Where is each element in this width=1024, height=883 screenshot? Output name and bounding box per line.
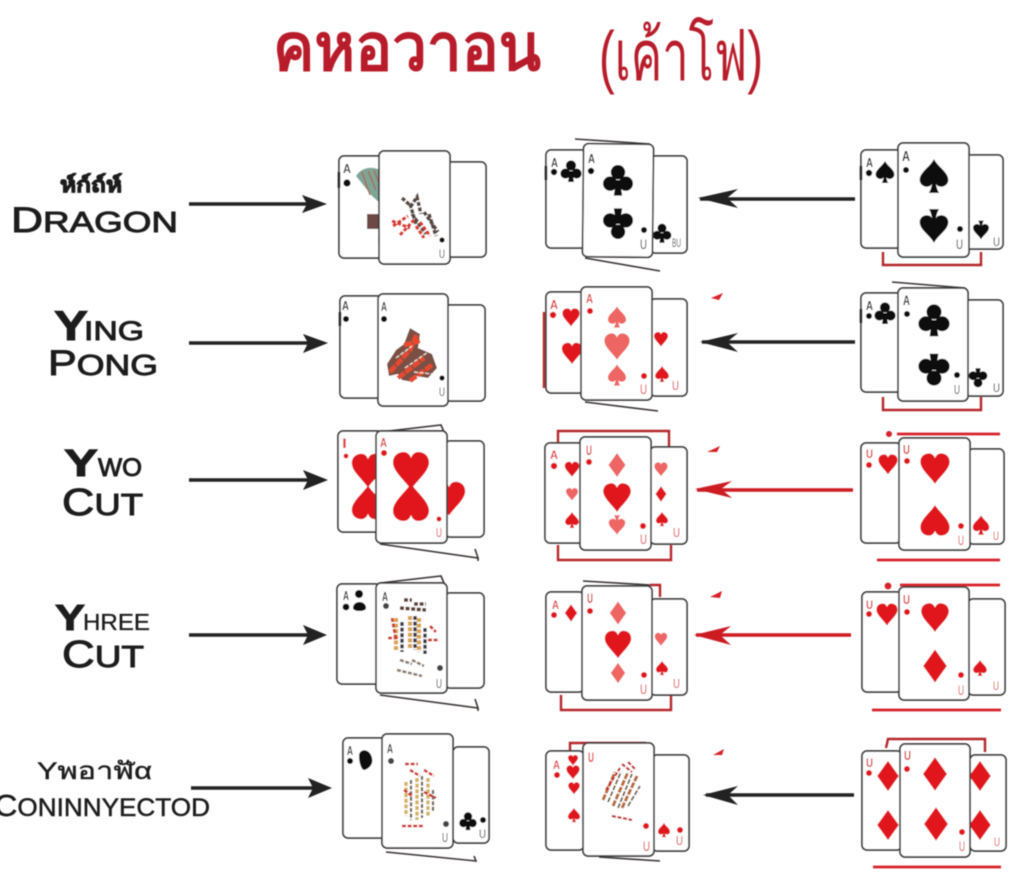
label: Connected: Yพอาฬัα xyxy=(37,758,152,785)
hand: clubs pair: A xyxy=(551,155,558,170)
arrow: Dragon to result hand xyxy=(189,195,327,213)
result hand: figure card: U xyxy=(442,830,448,845)
result hand: spade figure card xyxy=(340,294,485,406)
hand: diamonds and hearts: U xyxy=(640,681,647,697)
result hand: dragon figure card: A xyxy=(343,161,352,176)
result hand: figure card: A xyxy=(347,743,353,758)
label: Two Cut: Y xyxy=(64,443,98,485)
row 4: Three Cut xyxy=(55,576,1005,711)
arrow: Three Cut to result hand xyxy=(189,625,327,645)
arrow: Two Cut to result hand xyxy=(189,470,328,490)
hand: hearts and diamonds: U xyxy=(866,598,873,612)
hand: hearts and diamonds: U xyxy=(640,531,647,547)
label: Three Cut: Y xyxy=(55,597,85,638)
hand: clubs pair: BU xyxy=(672,236,681,250)
hand: spades pair: U xyxy=(956,236,963,252)
title xyxy=(273,10,763,95)
hand: clubs pair: U xyxy=(954,382,960,397)
label: Two Cut xyxy=(62,443,143,524)
title: คหอวาอน xyxy=(273,10,541,84)
arrow: black, right to left xyxy=(700,333,855,352)
result hand: dragon figure card xyxy=(339,151,486,264)
result hand: dragon figure card: U xyxy=(439,247,445,261)
result hand: figure card: U xyxy=(479,827,486,841)
hand: hearts with figure card: A xyxy=(553,758,560,772)
hand: diamonds and hearts: U xyxy=(673,676,680,691)
label: Ying Pong: ING xyxy=(84,316,144,346)
arrow: black, right to left xyxy=(703,786,854,805)
arrow: Ying Pong to result hand xyxy=(189,334,328,353)
hand: hearts with figure card xyxy=(546,743,724,861)
label: Ying Pong: Y xyxy=(54,302,88,349)
hand: six diamonds xyxy=(862,739,1006,867)
hand: hearts: A xyxy=(550,297,559,312)
hand: clubs pair: A xyxy=(903,292,910,308)
hand: hearts and diamonds: U xyxy=(993,679,999,693)
result hand: spade figure card: U xyxy=(439,385,445,399)
label: Dragon xyxy=(11,173,178,240)
hand: hearts: A xyxy=(586,291,593,306)
row 5: Connected xyxy=(0,734,1006,867)
result hand: figure card: A xyxy=(387,741,393,756)
title: (เค้าโฟ) xyxy=(599,16,763,95)
hand: spades pair xyxy=(861,143,1003,265)
hand: hearts pair: U xyxy=(866,447,873,461)
result hand: spade figure card: A xyxy=(381,299,387,314)
result hand: figure card xyxy=(337,576,484,711)
hand: spades pair: A xyxy=(866,155,873,170)
hand: diamonds and hearts: U xyxy=(587,590,593,606)
result hand: red hearts: l xyxy=(342,436,347,451)
label: Connected xyxy=(0,758,210,823)
arrow: red, right to left xyxy=(694,626,851,645)
hand: hearts pair: U xyxy=(903,442,910,457)
arrow: Connected to result hand xyxy=(191,778,332,798)
hand: clubs pair: A xyxy=(588,151,595,166)
hand: spades pair: U xyxy=(993,235,1000,249)
result hand: figure card: A xyxy=(343,588,349,603)
label: Three Cut: HREE xyxy=(83,609,150,635)
result hand: red hearts: U xyxy=(436,525,442,540)
hand: hearts with figure card: U xyxy=(588,749,594,765)
hand: hearts and diamonds: U xyxy=(958,682,964,698)
label: Two Cut: CUT xyxy=(62,482,143,524)
hand: hearts pair: U xyxy=(958,532,964,548)
result hand: spade figure card: A xyxy=(342,298,349,313)
hand: hearts and diamonds xyxy=(862,583,1005,710)
hand: spades pair: A xyxy=(902,148,910,165)
hand: hearts and diamonds xyxy=(545,431,720,560)
result hand: figure card: A xyxy=(382,589,388,604)
hand: hearts and diamonds: A xyxy=(550,448,558,462)
hand: six diamonds: U xyxy=(866,756,873,770)
label: Ying Pong xyxy=(48,302,158,383)
hand: hearts and diamonds: U xyxy=(903,592,910,607)
label: Ying Pong: PONG xyxy=(48,344,158,383)
row 3: Two Cut xyxy=(62,425,1004,561)
hand: six diamonds: U xyxy=(959,838,965,854)
hand: hearts: U xyxy=(672,378,679,393)
row 2: Ying Pong xyxy=(48,282,1003,411)
arrow: red, right to left xyxy=(695,481,853,498)
result hand: figure card: U xyxy=(436,676,442,691)
hand: hearts and diamonds: U xyxy=(586,442,592,458)
hand: hearts with figure card: U xyxy=(676,833,683,848)
hand: hearts and diamonds: U xyxy=(673,525,680,540)
label: Dragon: ห์ก์ถ์ห์ xyxy=(60,173,122,197)
result hand: figure card xyxy=(343,734,489,861)
hand: diamonds and hearts xyxy=(546,581,722,710)
label: Three Cut xyxy=(55,597,150,676)
hand: clubs pair xyxy=(546,139,687,271)
label: Three Cut: CUT xyxy=(62,634,144,676)
hand: clubs pair: U xyxy=(993,381,1000,395)
row 1: Dragon xyxy=(11,139,1003,271)
hand: clubs pair: A xyxy=(866,298,873,313)
result hand: red hearts: A xyxy=(380,435,387,450)
hand: clubs pair: U xyxy=(640,236,647,252)
hand: hearts with figure card: U xyxy=(643,838,650,854)
hand: hearts pair: U xyxy=(993,529,999,543)
hand: hearts: U xyxy=(640,381,647,397)
arrow: black, right to left xyxy=(698,189,855,208)
label: Two Cut: WO xyxy=(98,454,142,482)
hand: six diamonds: U xyxy=(904,748,911,763)
hand: hearts pair xyxy=(861,431,1004,560)
label: Connected: CONINNYECTOD xyxy=(0,788,210,823)
hand: diamonds and hearts: A xyxy=(552,598,559,612)
hand: six diamonds: U xyxy=(994,835,1000,849)
hand: clubs pair xyxy=(861,282,1003,410)
result hand: red hearts xyxy=(338,425,484,561)
hand: hearts xyxy=(544,287,723,411)
label: Dragon: DRAGON xyxy=(11,201,178,240)
